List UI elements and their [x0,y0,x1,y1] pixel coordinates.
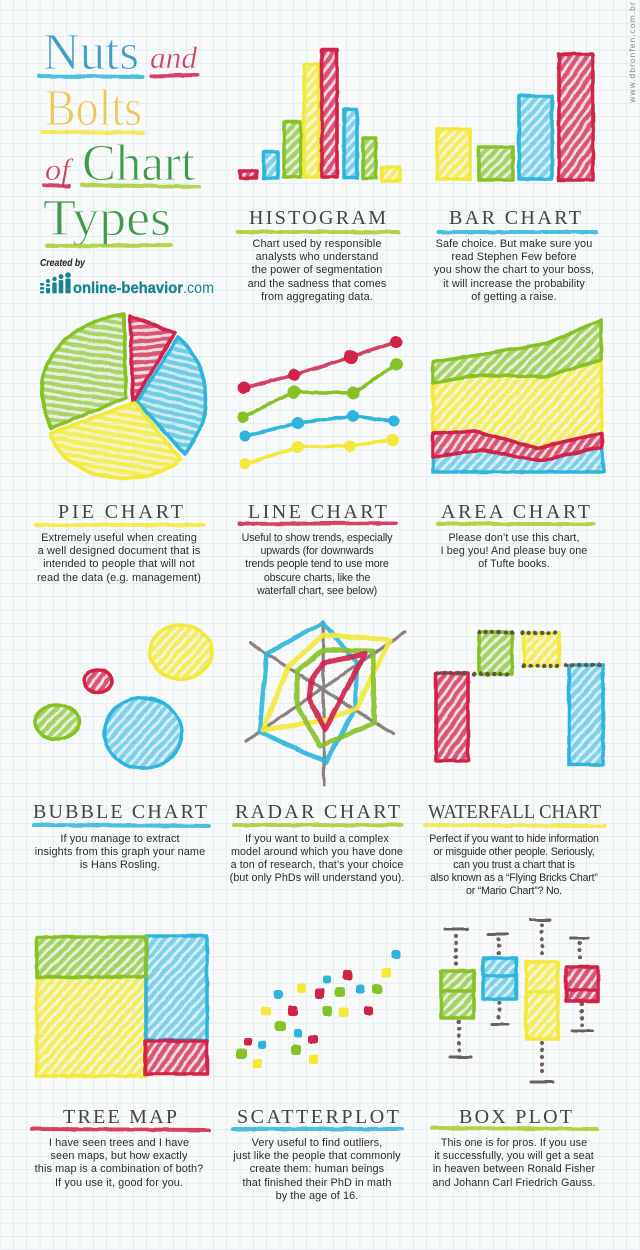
heading: tree map: TREE MAP [63,1106,177,1128]
chart: four lines [238,336,403,470]
logo wordmark: online-behavior [73,280,183,297]
text: scatterplot description: create them: human beings [250,1163,385,1175]
radar series: yellow [263,635,390,730]
underline [438,230,596,234]
text: pie chart description: read the data (e.g. management) [37,572,201,584]
text: bar chart description: it will increase the probability [443,278,585,290]
underline [32,1129,209,1130]
title underlines [39,75,199,246]
box: blue [483,958,516,999]
panel: radar chart [230,622,405,884]
text: histogram description: analysts who understand [256,251,378,263]
text: waterfall chart description: can you trust a chart that is [453,859,575,871]
text: box plot description: it successfully, you will get a seat [434,1150,594,1162]
box: red [566,967,598,1001]
text: box plot description: in heaven between Ronald Fisher [433,1163,596,1175]
text: radar chart description: a ton of research, that’s your choice [231,859,403,871]
chart: box plots [441,920,598,1082]
chart: radar web [246,622,405,785]
radar series: blue [260,623,357,762]
chart: stacked areas [433,320,604,472]
underline [238,230,398,234]
text: histogram description: Chart used by responsible [252,238,382,250]
text: bubble chart description: is Hans Rosling. [80,859,160,871]
panel: pie chart [36,314,206,584]
text: histogram description: from aggregating data. [261,291,373,303]
chart: pie slices [42,314,206,478]
chart: waterfall bricks [436,632,603,765]
underline [36,523,203,527]
text: scatterplot description: Very useful to find outliers, [252,1137,382,1149]
text: pie chart description: a well designed document that is [38,545,201,557]
logo icon [40,272,71,293]
text: bubble chart description: If you manage to extract [60,833,180,845]
text: histogram description: the power of segmentation [252,264,382,276]
whiskers [445,920,593,1082]
heading: box plot: BOX PLOT [459,1106,572,1128]
line: red series [238,336,402,394]
text: waterfall chart description: or “Mario Chart”? No. [466,885,562,897]
heading: bar chart: BAR CHART [449,207,581,229]
title word: Nuts: Nuts [43,24,139,81]
chart: bars [437,54,593,180]
title word: of: of [45,152,75,187]
heading: line chart: LINE CHART [248,501,387,523]
text: area chart description: of Tufte books. [478,558,550,570]
credit: created by: Created by [40,257,86,269]
chart: histogram bars [240,50,400,181]
connector dots [438,632,603,674]
heading: histogram: HISTOGRAM [249,207,386,229]
text: radar chart description: model around which you have done [231,846,403,858]
chart: scatter points [236,950,400,1068]
text: box plot description: This one is for pros. If you use [441,1137,587,1149]
line: yellow series [240,434,399,470]
logo suffix: .com [183,280,214,297]
text: tree map description: I have seen trees and I have [49,1137,189,1149]
text: pie chart description: intended to people that will not [43,558,195,570]
text: pie chart description: Extremely useful when creating [41,532,197,544]
heading: waterfall chart: WATERFALL CHART [428,801,601,823]
blue points [258,950,400,1049]
panel: tree map [32,936,209,1189]
text: tree map description: this map is a combination of both? [35,1163,203,1175]
underline [233,1127,402,1131]
panel: line chart [238,336,403,597]
underline [234,823,401,827]
text: area chart description: I beg you! And please buy one [441,545,587,557]
text: scatterplot description: just like the people that commonly [232,1150,401,1162]
underline [240,523,396,524]
title word: Chart: Chart [82,135,196,192]
red points [244,970,373,1046]
text: line chart description: obscure charts, like the [264,572,370,584]
heading: radar chart: RADAR CHART [235,801,400,823]
site url: www.dbronfen.com.br [628,1,637,103]
panel: waterfall chart [425,632,605,897]
underline [34,825,209,826]
text: radar chart description: (but only PhDs will understand you). [230,872,404,884]
text: line chart description: waterfall chart, see below) [256,585,377,597]
text: waterfall chart description: also known as a “Flying Bricks Chart” [430,872,598,884]
heading: scatterplot: SCATTERPLOT [237,1106,399,1128]
text: line chart description: trends people tend to use more [245,558,389,570]
title word: Bolts: Bolts [45,80,142,137]
radar axes [246,622,405,785]
line: green series [238,358,403,422]
panel: bar chart [434,54,596,303]
box: green [441,971,474,1018]
heading: pie chart: PIE CHART [58,501,183,523]
text: bar chart description: read Stephen Few before [451,251,577,263]
text: scatterplot description: by the age of 16. [276,1190,358,1202]
text: tree map description: If you use it, good for you. [55,1177,183,1189]
text: tree map description: seen maps, but how exactly [50,1150,188,1162]
title word: and: and [150,40,198,75]
text: radar chart description: If you want to build a complex [245,833,389,845]
chart: bubbles [35,625,212,768]
underline [438,522,594,526]
heading: area chart: AREA CHART [441,501,590,523]
logo: online-behavior.com [40,272,214,297]
green points [236,984,382,1059]
chart: tree map blocks [37,936,207,1076]
text: histogram description: and the sadness that comes [248,278,387,290]
text: waterfall chart description: Perfect if you want to hide information [429,833,599,845]
text: box plot description: and Johann Carl Friedrich Gauss. [432,1177,596,1189]
underline [432,1128,597,1129]
main title [39,24,199,247]
radar series: green [297,650,374,746]
text: line chart description: upwards (for downwards [260,545,374,557]
text: line chart description: Useful to show trends, especially [242,532,393,544]
underline [425,825,605,826]
title word: Types: Types [43,190,171,247]
text: bar chart description: of getting a raise. [471,291,557,303]
text: bar chart description: Safe choice. But make sure you [436,238,592,250]
text: area chart description: Please don’t use this chart, [448,532,580,544]
panel: histogram [238,50,400,303]
text: waterfall chart description: or misguide other people. Seriously, [433,846,595,858]
text: bar chart description: you show the chart to your boss, [434,264,594,276]
panel: scatterplot [232,950,402,1202]
panel: area chart [433,320,604,570]
text: scatterplot description: that finished their PhD in math [242,1177,392,1189]
yellow points [253,968,391,1068]
line: blue series [240,410,400,442]
box: yellow [526,962,558,1039]
text: bubble chart description: insights from this graph your name [35,846,205,858]
radar series: red [309,654,365,730]
heading: bubble chart: BUBBLE CHART [33,801,207,823]
panel: bubble chart [33,625,212,871]
panel: box plot [432,920,598,1189]
